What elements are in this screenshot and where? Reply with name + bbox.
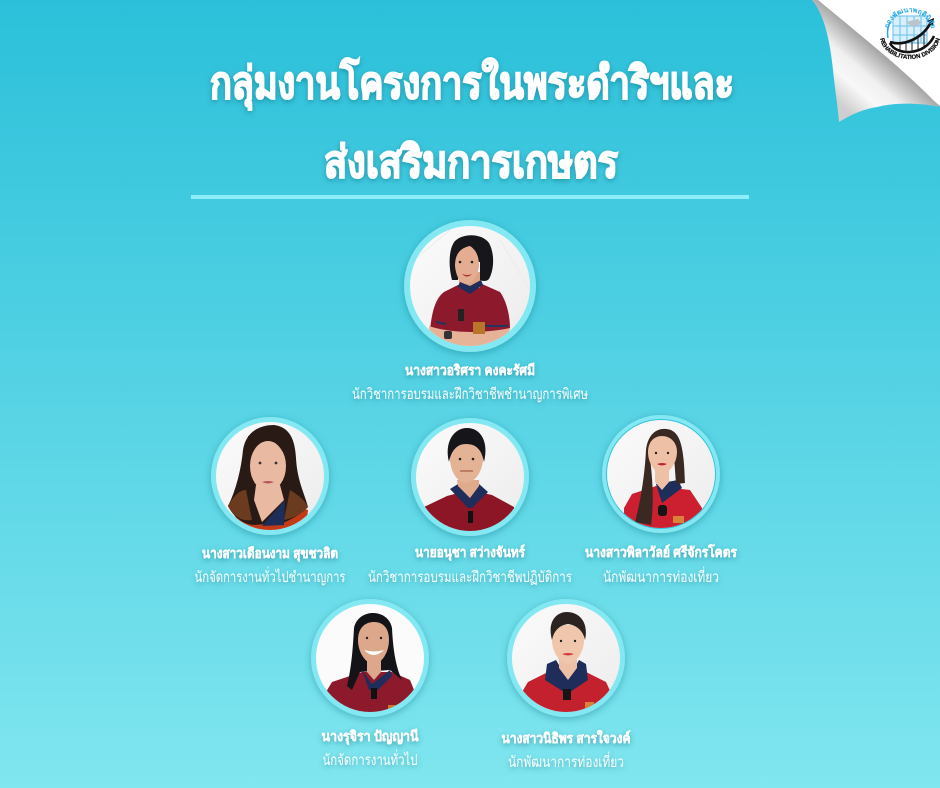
name and role: นายอนุชา: นักวิชาการอบรมและฝึกวิชาชีพปฏิบัติการ (368, 569, 572, 586)
name and role: นางรุจิรา (322, 728, 419, 769)
name and role: นางสาวนิธิพร: นักพัฒนาการท่องเที่ยว (508, 751, 624, 771)
name and role: นางสาวพิลาวัลย์ (585, 543, 737, 586)
name and role: นายอนุชา (368, 544, 572, 586)
name and role: นายอนุชา: นายอนุชา สว่างจันทร์ (415, 544, 525, 561)
page curl corner with logo (812, 0, 940, 122)
title (210, 56, 734, 187)
name and role: นางสาวพิลาวัลย์: นางสาวพิลาวัลย์ ศรีจักรโคตร (585, 543, 737, 560)
name and role: นางรุจิรา: นักจัดการงานทั่วไป (322, 749, 418, 769)
name and role: นางสาวเดือนงาม (194, 545, 346, 586)
name and role: นางสาวเดือนงาม: นักจัดการงานทั่วไปชำนาญการ (194, 566, 346, 586)
portrait: นางสาวอริศรา (404, 220, 536, 352)
logo (880, 8, 940, 60)
name and role: นางสาวพิลาวัลย์: นักพัฒนาการท่องเที่ยว (603, 566, 719, 586)
portrait: นางสาวนิธิพร (507, 599, 625, 717)
logo: กองพัฒนาพฤตินิสัย (885, 8, 936, 28)
name and role: นางสาวอริศรา (352, 362, 588, 403)
portrait: นางสาวพิลาวัลย์ (602, 415, 720, 533)
portrait: นางรุจิรา (311, 599, 429, 717)
name and role: นางสาวอริศรา: นักวิชาการอบรมและฝึกวิชาชีพชำนาญการพิเศษ (352, 386, 588, 403)
name and role: นางสาวอริศรา: นางสาวอริศรา คงคะรัศมี (405, 362, 535, 378)
name and role: นางสาวเดือนงาม: นางสาวเดือนงาม สุขชวลิต (202, 545, 338, 562)
portrait: นางสาวเดือนงาม (211, 417, 329, 535)
name and role: นางสาวนิธิพร: นางสาวนิธิพร สารใจวงค์ (502, 729, 630, 746)
title: ส่งเสริมการเกษตร (324, 138, 618, 187)
logo: REHABILITATION DIVISION (880, 38, 940, 60)
portrait: นายอนุชา (411, 418, 529, 536)
title: กลุ่มงานโครงการในพระดำริฯและ (210, 56, 734, 111)
name and role: นางสาวนิธิพร (502, 729, 630, 771)
title divider (191, 195, 749, 199)
name and role: นางรุจิรา: นางรุจิรา ปัญญานี (322, 728, 419, 745)
